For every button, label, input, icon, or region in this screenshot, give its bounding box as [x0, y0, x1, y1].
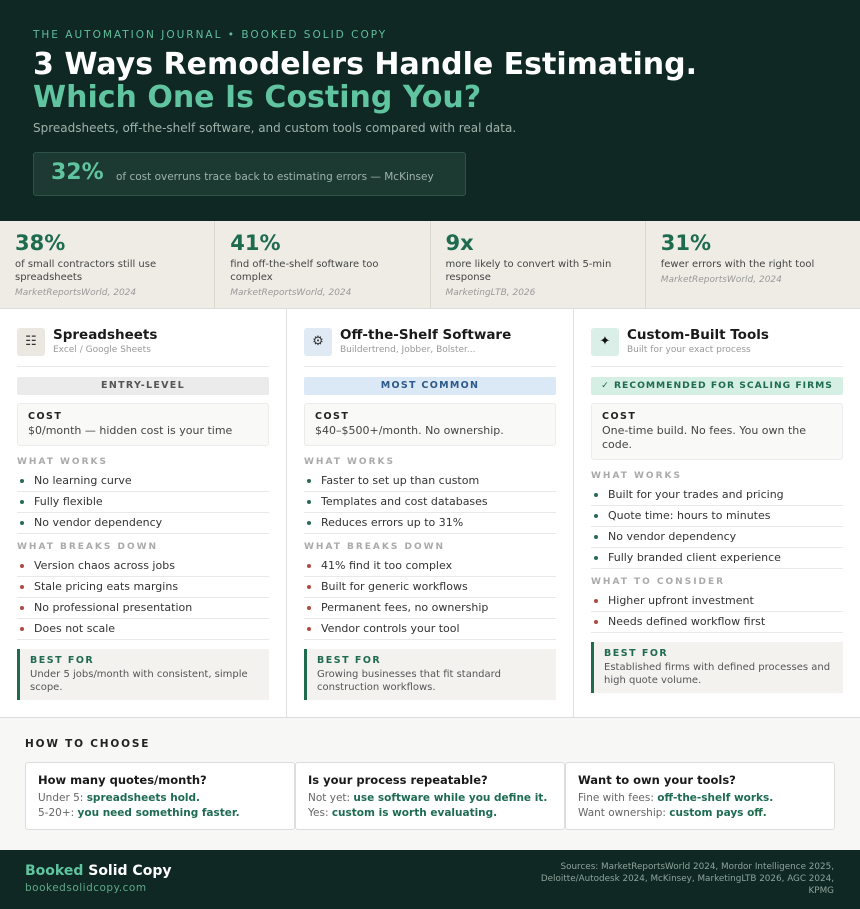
works list: No learning curve	[34, 474, 132, 487]
how to choose: HOW TO CHOOSE	[25, 738, 150, 750]
best for: Under 5 jobs/month with consistent, simple scope.	[30, 669, 248, 693]
panel: off-the-shelf: Off-the-Shelf Software	[340, 327, 511, 343]
stat 38%: 38%	[15, 231, 65, 255]
tag: entry-level	[17, 377, 269, 395]
panel: custom-built: Custom-Built Tools	[627, 327, 769, 343]
panel: off-the-shelf: Buildertrend, Jobber, Bolster...	[340, 345, 475, 355]
header	[0, 0, 860, 221]
breaks list: Vendor controls your tool	[321, 622, 460, 635]
panel: off-the-shelf	[287, 309, 574, 717]
stat 41%	[215, 221, 430, 308]
panel: custom-built: WHAT TO CONSIDER	[591, 577, 725, 587]
panel: spreadsheets: WHAT WORKS	[17, 457, 108, 467]
title line 1: 3 Ways Remodelers Handle Estimating.	[33, 47, 697, 82]
stat 41%: 41%	[230, 231, 281, 255]
best for: BEST FOR	[30, 655, 94, 666]
url: bookedsolidcopy.com	[25, 882, 147, 894]
subtitle: Spreadsheets, off-the-shelf software, and custom tools compared with real data.	[33, 121, 516, 135]
breaks list: No professional presentation	[34, 601, 192, 614]
title line 2: Which One Is Costing You?	[33, 80, 481, 115]
works list: Built for your trades and pricing	[608, 488, 784, 501]
stat 9x: 9x	[446, 231, 474, 255]
callout: 32%: 32%	[51, 160, 104, 185]
works list: Templates and cost databases	[321, 495, 488, 508]
stat 9x: more likely to convert with 5-min response	[446, 259, 611, 283]
card: quotes: How many quotes/month?	[38, 773, 207, 787]
stat 41%: MarketReportsWorld, 2024	[230, 288, 351, 298]
panel: spreadsheets: Spreadsheets	[53, 327, 157, 343]
panel: spreadsheets: Excel / Google Sheets	[53, 345, 151, 355]
cost: COST	[602, 411, 636, 422]
breaks list: Permanent fees, no ownership	[321, 601, 488, 614]
stat 31%	[660, 231, 814, 285]
stat 38%: of small contractors still use spreadsheets	[15, 259, 156, 283]
breaks list: 41% find it too complex	[321, 559, 452, 572]
stat 41%: find off-the-shelf software too complex	[230, 259, 379, 283]
works list: Fully branded client experience	[608, 551, 781, 564]
breaks list: Version chaos across jobs	[34, 559, 175, 572]
tag: most common: MOST COMMON	[381, 380, 479, 391]
footer	[0, 850, 860, 909]
card: process: Is your process repeatable?	[308, 773, 488, 787]
best for: Growing businesses that fit standard construction workflows.	[317, 669, 501, 693]
best for	[591, 642, 843, 693]
breaks list	[304, 559, 556, 640]
stat 31%: fewer errors with the right tool	[661, 259, 814, 270]
stat 31%: MarketReportsWorld, 2024	[661, 275, 782, 285]
stats strip	[0, 221, 860, 309]
icon: sparkle	[591, 328, 619, 356]
panel: off-the-shelf: WHAT BREAKS DOWN	[304, 542, 445, 552]
card: ownership: Want to own your tools?	[578, 773, 736, 787]
best for	[17, 649, 269, 700]
breaks list	[17, 559, 269, 640]
card: process: Not yet: use software while you define it.	[308, 792, 547, 804]
callout: 32%	[33, 152, 466, 196]
cost: One-time build. No fees. You own the code.	[602, 424, 806, 451]
how to choose	[0, 718, 860, 850]
stat 31%: 31%	[661, 231, 711, 255]
stat 9x	[430, 221, 646, 308]
best for: BEST FOR	[317, 655, 381, 666]
icon: sparkle: ✦	[600, 334, 610, 349]
works list: Faster to set up than custom	[321, 474, 479, 487]
sources: Sources: MarketReportsWorld 2024, Mordor Intelligence 2025, Deloitte/Autodesk 2024, McKinsey, MarketingLTB 2026, AGC 2024, KPMG	[541, 862, 834, 896]
cost: $0/month — hidden cost is your time	[28, 424, 232, 437]
card: ownership: Want ownership: custom pays off.	[578, 807, 767, 819]
breaks list: Built for generic workflows	[321, 580, 468, 593]
works list: No vendor dependency	[608, 530, 736, 543]
tag: most common	[304, 377, 556, 395]
tag: recommended: ✓ RECOMMENDED FOR SCALING FIRMS	[601, 380, 833, 391]
best for: Established firms with defined processes and high quote volume.	[604, 662, 830, 686]
card: ownership: Fine with fees: off-the-shelf works.	[578, 792, 773, 804]
icon: grid: ☷	[25, 334, 37, 349]
icon: gear: ⚙	[312, 334, 324, 349]
works list: No vendor dependency	[34, 516, 162, 529]
best for	[304, 649, 556, 700]
cost	[591, 403, 843, 460]
comparison columns	[0, 309, 860, 718]
panel: custom-built	[591, 327, 843, 693]
breaks list: Stale pricing eats margins	[34, 580, 178, 593]
consider list	[591, 594, 843, 633]
panel: spreadsheets: WHAT BREAKS DOWN	[17, 542, 158, 552]
panel: custom-built: WHAT WORKS	[591, 471, 682, 481]
works list	[304, 474, 556, 534]
cost: COST	[315, 411, 349, 422]
tag: recommended	[591, 377, 843, 395]
card: process	[295, 762, 565, 830]
tag: entry-level: ENTRY-LEVEL	[101, 380, 185, 391]
best for: BEST FOR	[604, 648, 668, 659]
works list	[591, 488, 843, 569]
stat 38%	[0, 221, 215, 308]
works list: Fully flexible	[34, 495, 103, 508]
stat 38%: MarketReportsWorld, 2024	[15, 288, 136, 298]
callout: 32%: of cost overruns trace back to estimating errors — McKinsey	[116, 171, 434, 183]
cost: COST	[28, 411, 62, 422]
icon: gear	[304, 328, 332, 356]
panel: spreadsheets	[0, 309, 287, 717]
cost: $40–$500+/month. No ownership.	[315, 424, 504, 437]
brand: Booked Solid Copy	[25, 863, 171, 879]
stat 9x: MarketingLTB, 2026	[446, 288, 535, 298]
card: quotes: Under 5: spreadsheets hold.	[38, 792, 200, 804]
consider list: Higher upfront investment	[608, 594, 754, 607]
consider list: Needs defined workflow first	[608, 615, 765, 628]
works list	[17, 474, 269, 534]
card: process: Yes: custom is worth evaluating.	[308, 807, 497, 819]
works list: Quote time: hours to minutes	[608, 509, 770, 522]
card: quotes: 5-20+: you need something faster.	[38, 807, 240, 819]
panel: custom-built: Built for your exact process	[627, 345, 751, 355]
works list: Reduces errors up to 31%	[321, 516, 463, 529]
icon: grid	[17, 328, 45, 356]
cost	[304, 403, 556, 446]
kicker: THE AUTOMATION JOURNAL • BOOKED SOLID COPY	[33, 29, 387, 41]
card: ownership	[565, 762, 835, 830]
card: quotes	[25, 762, 295, 830]
breaks list: Does not scale	[34, 622, 115, 635]
cost	[17, 403, 269, 446]
panel: off-the-shelf: WHAT WORKS	[304, 457, 395, 467]
